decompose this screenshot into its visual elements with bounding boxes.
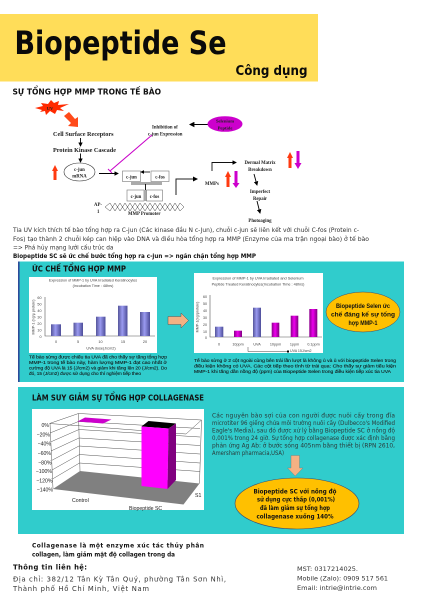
chart: MMP-1 with selenium peptide: 60	[203, 295, 207, 299]
selenium peptide ellipse: Selenium	[216, 118, 234, 124]
contact: company details	[297, 565, 388, 592]
outcome labels: Breakdown	[248, 168, 272, 173]
chart: MMP-1 with selenium peptide	[194, 273, 323, 353]
chart 1 caption: MMP-1 trong tế bào này, hàm lượng MMP-1 đạt cao nhất ở	[29, 359, 167, 366]
chart: MMP-1 by UVA dose: 30	[37, 316, 42, 320]
chart: MMP-1 by UVA dose: 50	[37, 302, 42, 306]
chart 1 caption: đó, 15 (J/cm2) được sử dụng cho thí nghiệm tiếp theo	[29, 370, 141, 377]
collagenase note	[32, 542, 204, 558]
chart: MMP-1 with selenium peptide: MMP-1(ng/protein)	[196, 302, 200, 332]
chart: MMP-1 with selenium peptide: 1ppm	[290, 342, 299, 346]
chart: MMP-1 with selenium peptide: 30	[203, 316, 207, 320]
method text: Các nguyên bào sợi của con người được nuôi cấy trong đĩa	[212, 412, 395, 420]
collagenase note: Collagenase là một enzyme xúc tác thủy phân	[32, 542, 204, 550]
chart: MMP-1 by UVA dose	[29, 277, 157, 353]
chart: MMP-1 with selenium peptide: 50	[203, 302, 207, 306]
chart 1 caption: Tế bào sừng được chiếu tia UVA đã cho thấy sự tăng tổng hợp	[29, 354, 167, 360]
callout: collagenase result: Biopeptide SC với nồng độ	[254, 488, 336, 496]
diagram: MMP pathway	[35, 100, 302, 224]
method text: 0,001% trong 24 giờ. Sự tổng hợp collagenase được xác định bằng	[212, 435, 395, 442]
contact: address: Thành phố Hồ Chí Minh, Việt Nam	[12, 585, 149, 593]
inhibition label: c-jun Expression	[148, 132, 183, 138]
outcome labels: Dermal Matrix	[244, 161, 276, 166]
chart: MMP-1 with selenium peptide: Peptide Treated Keratinocytes(Incubation Time : 48hrs)	[212, 282, 305, 286]
outcome labels	[244, 161, 276, 224]
cascade labels: Cell Surface Receptors	[53, 131, 114, 138]
chart 1 caption: cường độ UVA là 15 (J/cm2) và giảm khi tăng lên 20 (J/cm2). Do	[29, 366, 167, 372]
callout: collagenase result	[235, 478, 359, 529]
chart 2 caption: Tế bào sừng ở 2 cột ngoài cùng bên trái lần lượt là không ủ và ủ với biopeptide Selen trong	[194, 357, 396, 364]
chart: MMP-1 with selenium peptide: 10	[203, 330, 207, 334]
inhibition label: Inhibition of	[152, 126, 178, 130]
c-jun mRNA ellipse: c-jun	[74, 168, 85, 173]
contact: company details: MST: 0317214025.	[297, 565, 358, 573]
c-jun mRNA ellipse: mRNA	[72, 174, 87, 180]
chart: MMP-1 by UVA dose: 0	[55, 340, 57, 344]
icon: MMP up and down arrows	[225, 171, 240, 188]
MMP promoter DNA: MMP Promoter	[128, 212, 161, 217]
selenium peptide ellipse: Peptide	[218, 126, 232, 130]
category labels: Control	[72, 498, 89, 504]
MMP promoter DNA: AP-	[94, 203, 102, 208]
protein boxes	[122, 171, 169, 201]
method text: phản ứng Ag Ab: ở bước sóng 405nm bằng thiết bị (RPN 2610,	[212, 442, 395, 450]
callout: selenium result	[326, 292, 400, 332]
chart: MMP-1 with selenium peptide: UVA	[253, 342, 261, 346]
intro text: Tia UV kích thích tế bào tổng hợp ra C-jun (Các kinase đầu N c-Jun), chuỗi c-jun sẽ liên kết với chuỗi C-fos (Protein c-	[12, 225, 359, 234]
arrow: to result	[288, 456, 303, 476]
callout: collagenase result: collagenase xuống 140%	[256, 512, 334, 520]
value axis: −20%	[37, 432, 50, 438]
arrow: to second chart	[168, 313, 188, 328]
panel heading: ỨC CHẾ TỔNG HỢP MMP	[32, 262, 126, 274]
panel: MMP inhibition	[18, 262, 404, 382]
outcome labels: Imperfect	[250, 190, 271, 195]
intro text: => Phá hủy mạng lưới cấu trúc da	[13, 244, 114, 252]
chart: MMP-1 by UVA dose: Expression of MMP-1 by UVA Irradiated Keratinocytes	[49, 278, 137, 282]
callout: collagenase result: đã làm giảm sự tổng hợp	[260, 503, 331, 512]
contact: address	[12, 564, 226, 593]
category labels: Biopeptide SC	[129, 506, 162, 512]
chart: MMP-1 by UVA dose: MMP-1 (ng/µ protein)	[32, 300, 36, 334]
chart 1 caption	[29, 354, 167, 377]
method text: Eagle's Media), sau đó được xử lý bằng Biopeptide SC ở nồng độ	[212, 426, 395, 434]
icon: red up arrow	[52, 165, 58, 180]
contact: company details: Mobile (Zalo): 0909 517 561	[297, 574, 388, 582]
chart: MMP-1 with selenium peptide: 0	[205, 336, 207, 340]
arrow: MMPs to breakdown	[212, 162, 236, 171]
method text	[212, 412, 395, 457]
MMP promoter DNA: 1	[97, 210, 100, 215]
panel: collagenase reduction	[18, 387, 404, 534]
protein boxes: c-fos	[150, 195, 159, 200]
value axis: −120%	[36, 478, 53, 484]
protein boxes: c-fos	[155, 176, 165, 180]
chart: MMP-1 with selenium peptide: 20	[203, 323, 207, 327]
category labels	[72, 493, 201, 512]
cascade labels	[53, 131, 116, 162]
chart: MMP-1 by UVA dose: UVA dose(J/cm2)	[86, 346, 116, 350]
method text: microtiter 96 giếng chứa môi trường nuôi cấy (Dulbecco's Modified	[212, 420, 395, 427]
chart: MMP-1 by UVA dose: 0	[39, 335, 42, 339]
chart: MMP-1 with selenium peptide: 10ppm	[232, 342, 244, 346]
arrow: promoter to MMPs	[176, 179, 197, 195]
chart: MMP-1 by UVA dose: 40	[37, 309, 42, 313]
MMP promoter DNA	[94, 203, 184, 217]
value axis: −140%	[37, 488, 53, 494]
contact: address: Địa chỉ: 382/12 Tân Kỳ Tân Quý, phường Tân Sơn Nhì,	[13, 576, 226, 584]
chart: MMP-1 by UVA dose: (Incubation Time : 48hrs)	[73, 284, 113, 288]
chart: MMP-1 by UVA dose: 20	[37, 322, 42, 326]
floor	[53, 471, 200, 504]
protein boxes: c-jun	[131, 195, 142, 200]
subtitle: Công dụng	[236, 63, 308, 79]
chart 2 caption: điều kiện không có UVA. Các cột tiếp theo tính từ trái qua: Cho thấy sự giảm tiếu kiện	[194, 364, 396, 370]
key conclusion: Biopeptide SC sẽ ức chế bước tổng hợp ra c-jun => ngăn chặn tổng hợp MMP	[13, 251, 256, 260]
method text: Amersham pharmacia,USA)	[212, 451, 284, 457]
arrow: UV to receptors	[64, 112, 78, 127]
contact: address: Thông tin liên hệ:	[13, 564, 87, 572]
selenium peptide ellipse	[190, 116, 242, 132]
chart: MMP-1 with selenium peptide: 10ppm	[270, 342, 281, 346]
icon: breakdown up and down arrows	[287, 151, 302, 169]
chart: MMP-1 with selenium peptide: 0	[218, 342, 220, 346]
MMPs label: MMPs	[205, 182, 219, 187]
chart 2 caption	[194, 357, 396, 375]
panel heading: LÀM SUY GIẢM SỰ TỔNG HỢP COLLAGENASE	[32, 392, 204, 402]
value axis: −80%	[38, 460, 52, 466]
title banner	[0, 14, 318, 82]
heading: MMP synthesis: SỰ TỔNG HỢP MMP TRONG TẾ BÀO	[12, 84, 161, 96]
callout: collagenase result: sử dụng cực thấp (0,001%)	[257, 494, 335, 504]
biopeptide bar	[142, 421, 176, 489]
chart: MMP-1 by UVA dose: 15	[121, 340, 125, 344]
intro text: Fos) tạo thành 2 chuỗi kép can hiệp vào DNA và điều hòa tổng hợp ra MMP (Enzyme của ma trận ngoại bào) ở tế bào	[13, 234, 369, 243]
chart: collagenase 3D bars	[32, 409, 204, 512]
intro text	[12, 225, 369, 260]
icon: UV burst: UV	[47, 106, 54, 111]
c-jun mRNA ellipse	[64, 163, 95, 181]
callout: selenium result: chế đáng kể sự tổng	[331, 312, 395, 318]
chart: MMP-1 by UVA dose: 5	[77, 340, 79, 344]
grid walls	[50, 414, 202, 489]
chart: MMP-1 by UVA dose: 10	[98, 340, 103, 344]
value axis: −100%	[36, 469, 52, 475]
chart: MMP-1 by UVA dose: 10	[37, 328, 42, 332]
value axis: −40%	[38, 442, 51, 448]
control bar	[78, 418, 112, 424]
chart 2 caption: MMP-1 khi tăng dần nồng độ (ppm) của Biopeptide Selen trong điều kiện tiếp xúc tia UVA	[194, 368, 392, 375]
chart: MMP-1 with selenium peptide: Expression of MMP-1 by UVA Irradiated and Selenium	[212, 276, 304, 280]
arrow: inhibition line	[108, 135, 152, 173]
collagenase note: collagen, làm giảm mật độ collagen trong da	[32, 552, 175, 558]
outcome labels: Photoaging	[248, 219, 272, 224]
chart: MMP-1 with selenium peptide: 0.1ppm	[307, 342, 320, 346]
value axis	[36, 423, 53, 494]
outcome labels: Repair	[253, 197, 268, 202]
value axis: 0%	[42, 423, 49, 429]
chart: MMP-1 with selenium peptide: UVA 15J/cm2	[290, 349, 312, 353]
callout: selenium result: Biopeptide Selen ức	[336, 303, 390, 310]
category labels: S1	[195, 493, 201, 499]
title: Biopeptide Se	[14, 24, 226, 62]
chart: MMP-1 by UVA dose: 60	[37, 296, 42, 300]
protein boxes: c-jun	[126, 176, 137, 180]
value axis: −60%	[38, 451, 51, 457]
contact: company details: Email: intrie@intrie.com	[297, 584, 377, 592]
cascade labels: Protein Kinase Cascade	[53, 147, 116, 154]
chart: MMP-1 by UVA dose: 20	[143, 340, 147, 344]
icon: UV burst	[35, 100, 69, 115]
chart: MMP-1 with selenium peptide: 40	[203, 309, 207, 313]
callout: selenium result: hợp MMP-1	[348, 320, 378, 327]
inhibition label	[148, 126, 183, 138]
